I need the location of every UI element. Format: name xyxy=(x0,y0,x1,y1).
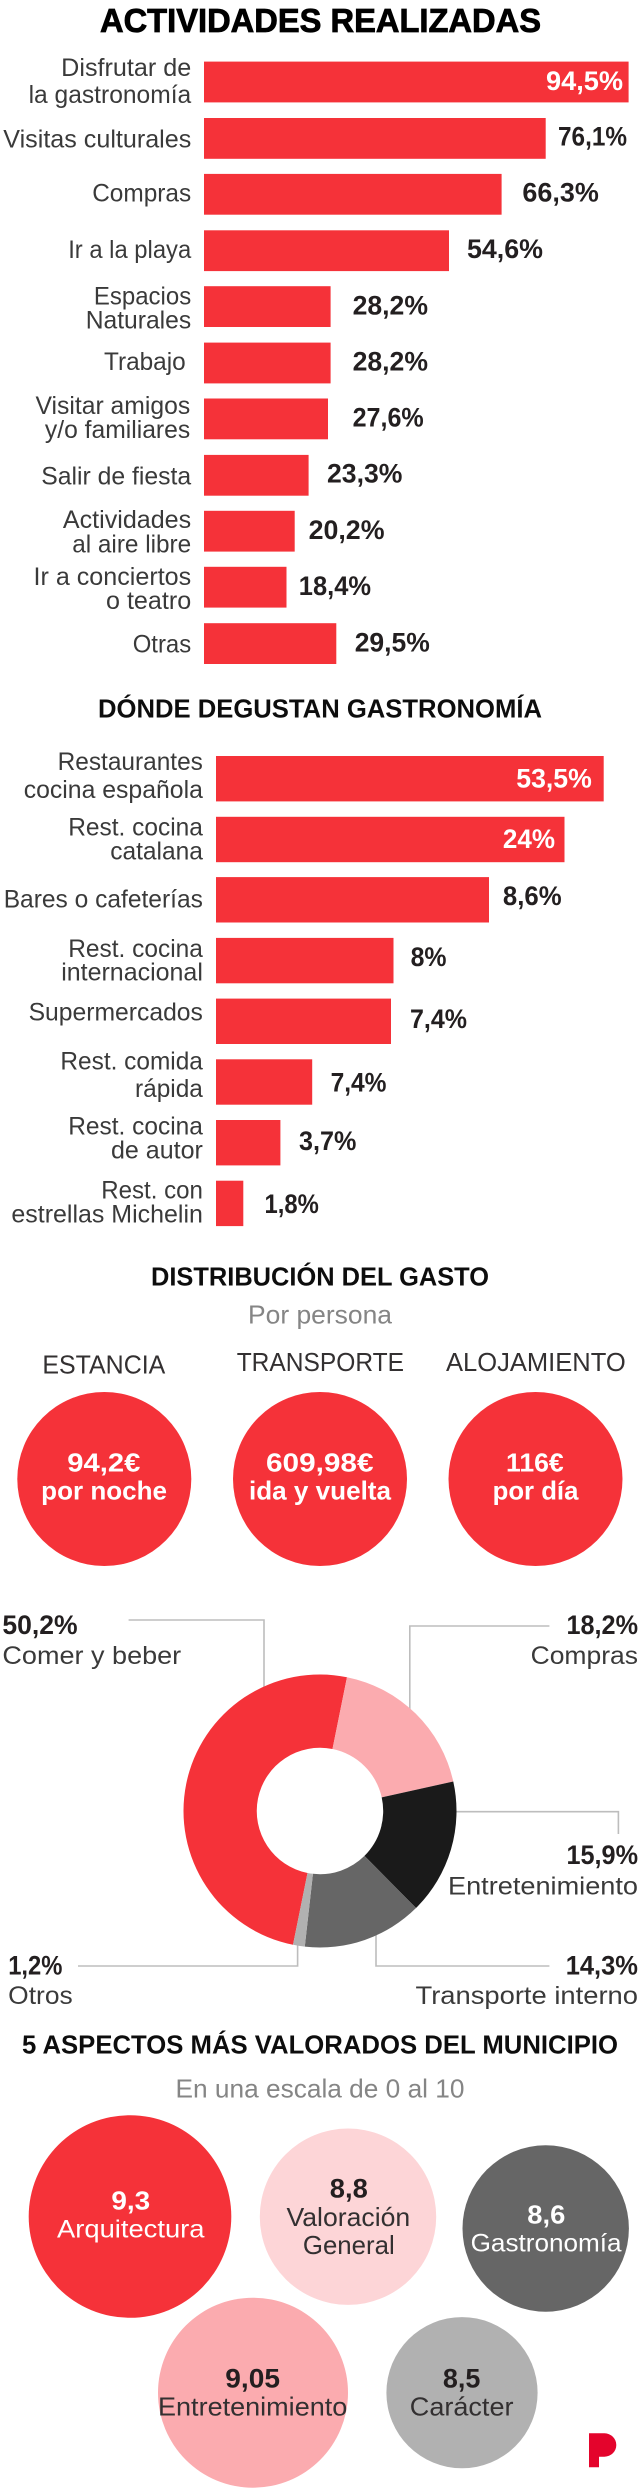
bar row: rest. con estrellas michelin xyxy=(11,1177,319,1228)
stat: transporte xyxy=(233,1347,407,1566)
callout: entretenimiento: Entretenimiento xyxy=(448,1872,638,1900)
bubble: carácter: Carácter xyxy=(410,2392,514,2422)
bar row: ir a conciertos o teatro: 18,4% xyxy=(299,571,371,601)
bar row: visitar amigos y/o familiares: 27,6% xyxy=(353,403,424,433)
panel: distribución del gasto xyxy=(17,1261,626,1566)
bar row: disfrutar de la gastronomía xyxy=(29,54,629,109)
bar row: visitas culturales: Visitas culturales xyxy=(3,125,191,153)
stat: alojamiento: por día xyxy=(493,1475,579,1505)
bubble: carácter: 8,5 xyxy=(443,2363,480,2393)
bar row: rest. comida rápida xyxy=(60,1047,387,1105)
bubble: valoración general: Valoración xyxy=(286,2202,410,2232)
stat: estancia: por noche xyxy=(41,1475,167,1505)
callout: otros: 1,2% xyxy=(8,1950,62,1980)
bar row: ir a la playa: Ir a la playa xyxy=(68,236,191,264)
bubble: gastronomía: Gastronomía xyxy=(471,2230,622,2258)
stat: alojamiento xyxy=(446,1347,626,1566)
stat: transporte: TRANSPORTE xyxy=(237,1347,404,1377)
heading: aspectos más valorados: 5 ASPECTOS MÁS VALORADOS DEL MUNICIPIO xyxy=(22,2029,618,2059)
bar row: rest. cocina de autor: de autor xyxy=(111,1137,203,1165)
callout: otros: Otros xyxy=(8,1982,73,2010)
bar row: compras: 66,3% xyxy=(522,178,599,208)
bar row: rest. cocina de autor: Rest. cocina xyxy=(68,1113,203,1141)
bar row: disfrutar de la gastronomía: la gastronomía xyxy=(29,81,191,109)
bar row: rest. cocina de autor: 3,7% xyxy=(299,1126,356,1156)
bar row: ir a la playa: 54,6% xyxy=(467,234,543,264)
bar row: restaurantes cocina española xyxy=(24,748,604,804)
bar row: espacios naturales: 28,2% xyxy=(353,290,428,320)
bar row: bares o cafeterías: Bares o cafeterías xyxy=(4,886,203,914)
leader lines xyxy=(78,1620,618,1966)
bubble: arquitectura: 9,3 xyxy=(111,2185,150,2215)
bar row: rest. comida rápida: Rest. comida xyxy=(60,1047,203,1075)
bar row: rest. con estrellas michelin: estrellas Michelin xyxy=(11,1200,203,1228)
bar row: actividades al aire libre: Actividades xyxy=(63,506,191,534)
bar row: supermercados: 7,4% xyxy=(410,1004,467,1034)
bar row: rest. con estrellas michelin: 1,8% xyxy=(264,1189,319,1219)
bubble: valoración general: 8,8 xyxy=(330,2174,368,2204)
bar row: visitar amigos y/o familiares: y/o familiares xyxy=(45,416,190,444)
bar row: actividades al aire libre xyxy=(63,506,385,558)
heading: dónde degustan gastronomía: DÓNDE DEGUSTAN GASTRONOMÍA xyxy=(98,694,542,724)
panel: dónde degustan gastronomía xyxy=(4,694,604,1228)
callout: compras: Compras xyxy=(531,1642,638,1670)
stat: transporte: ida y vuelta xyxy=(249,1475,392,1505)
title: actividades realizadas: ACTIVIDADES REALIZADAS xyxy=(100,2,541,39)
subheading: por persona: Por persona xyxy=(248,1299,393,1329)
bubble: entretenimiento xyxy=(158,2298,348,2488)
bubble: arquitectura: Arquitectura xyxy=(57,2215,205,2243)
bar row: trabajo: 28,2% xyxy=(353,346,428,376)
bar row: ir a conciertos o teatro: o teatro xyxy=(106,587,191,615)
bar row: rest. cocina internacional xyxy=(61,935,446,987)
bar row: rest. cocina internacional: Rest. cocina xyxy=(68,935,203,963)
stat: estancia: ESTANCIA xyxy=(42,1349,166,1379)
bar row: ir a conciertos o teatro xyxy=(34,563,371,615)
bubble: gastronomía: 8,6 xyxy=(527,2199,565,2229)
bar row: actividades al aire libre: al aire libre xyxy=(72,530,191,558)
callout: compras xyxy=(531,1610,638,1670)
callout: transporte interno: 14,3% xyxy=(566,1950,638,1980)
bar row: disfrutar de la gastronomía: 94,5% xyxy=(546,66,623,96)
bar row: supermercados xyxy=(29,998,467,1044)
bar row: rest. cocina catalana xyxy=(68,814,564,865)
callout: comer y beber: 50,2% xyxy=(2,1610,78,1640)
bar row: espacios naturales xyxy=(86,282,428,334)
bar row: supermercados: Supermercados xyxy=(29,998,203,1026)
bar row: rest. cocina catalana: catalana xyxy=(110,837,203,865)
bar row: visitar amigos y/o familiares xyxy=(36,392,424,444)
bar row: salir de fiesta xyxy=(41,455,402,496)
panel: actividades realizadas xyxy=(3,2,629,664)
bar row: rest. cocina internacional: internacional xyxy=(61,959,203,987)
bubble: gastronomía xyxy=(462,2145,629,2312)
stat: estancia: 94,2€ xyxy=(67,1448,140,1478)
bar row: rest. comida rápida: rápida xyxy=(135,1075,203,1103)
bar row: ir a conciertos o teatro: Ir a conciertos xyxy=(34,563,191,591)
bar row: rest. cocina internacional: 8% xyxy=(411,942,446,972)
subheading: escala: En una escala de 0 al 10 xyxy=(176,2073,464,2103)
stat: alojamiento: 116€ xyxy=(506,1448,564,1478)
panel: donut chart de gasto xyxy=(2,1610,638,2010)
bubble: entretenimiento: 9,05 xyxy=(225,2363,280,2393)
panel: aspectos más valorados xyxy=(22,2029,629,2488)
bar row: otras: 29,5% xyxy=(355,627,430,657)
bar row: visitas culturales: 76,1% xyxy=(558,121,627,151)
donut chart xyxy=(183,1674,457,1948)
bar row: restaurantes cocina española: 53,5% xyxy=(516,764,592,794)
bar row: salir de fiesta: 23,3% xyxy=(327,459,402,489)
bubble: entretenimiento: Entretenimiento xyxy=(158,2392,347,2422)
callout: transporte interno: Transporte interno xyxy=(416,1982,638,2010)
bubble: carácter xyxy=(386,2317,538,2468)
callout: comer y beber: Comer y beber xyxy=(2,1642,181,1670)
bar row: compras xyxy=(92,174,599,215)
bar row: disfrutar de la gastronomía: Disfrutar de xyxy=(61,54,191,82)
callout: entretenimiento xyxy=(448,1840,638,1900)
bar row: espacios naturales: Espacios xyxy=(94,282,191,310)
bar row: otras: Otras xyxy=(133,631,191,659)
stat: alojamiento: ALOJAMIENTO xyxy=(446,1347,626,1377)
callout: otros xyxy=(8,1950,73,2010)
bar row: otras xyxy=(133,623,430,664)
callout: transporte interno xyxy=(416,1950,638,2010)
bar row: restaurantes cocina española: Restaurantes xyxy=(58,748,203,776)
stat: estancia xyxy=(17,1349,191,1566)
bar row: rest. cocina catalana: Rest. cocina xyxy=(68,814,203,842)
bar row: actividades al aire libre: 20,2% xyxy=(309,515,384,545)
bubble: arquitectura xyxy=(29,2115,231,2318)
stat: transporte: 609,98€ xyxy=(266,1448,374,1478)
bar row: trabajo: Trabajo xyxy=(104,348,186,376)
bar row: salir de fiesta: Salir de fiesta xyxy=(41,462,191,490)
bar row: rest. cocina catalana: 24% xyxy=(503,824,555,854)
bar row: espacios naturales: Naturales xyxy=(86,306,191,334)
bar row: rest. cocina de autor xyxy=(68,1113,356,1165)
bar row: visitar amigos y/o familiares: Visitar amigos xyxy=(36,392,190,420)
bar row: bares o cafeterías: 8,6% xyxy=(503,881,562,911)
bar row: rest. comida rápida: 7,4% xyxy=(331,1067,386,1097)
bar row: restaurantes cocina española: cocina española xyxy=(24,776,203,804)
bubble: valoración general xyxy=(260,2128,436,2305)
bar row: visitas culturales xyxy=(3,118,627,159)
icon: logo P xyxy=(589,2433,616,2467)
heading: distribución del gasto: DISTRIBUCIÓN DEL GASTO xyxy=(151,1261,489,1291)
bar row: ir a la playa xyxy=(68,230,543,271)
bar row: bares o cafeterías xyxy=(4,877,562,922)
bar row: compras: Compras xyxy=(92,180,191,208)
callout: comer y beber xyxy=(2,1610,181,1670)
bar row: trabajo xyxy=(104,343,428,383)
bar row: rest. con estrellas michelin: Rest. con xyxy=(101,1177,203,1205)
bubble: valoración general: General xyxy=(303,2230,395,2260)
